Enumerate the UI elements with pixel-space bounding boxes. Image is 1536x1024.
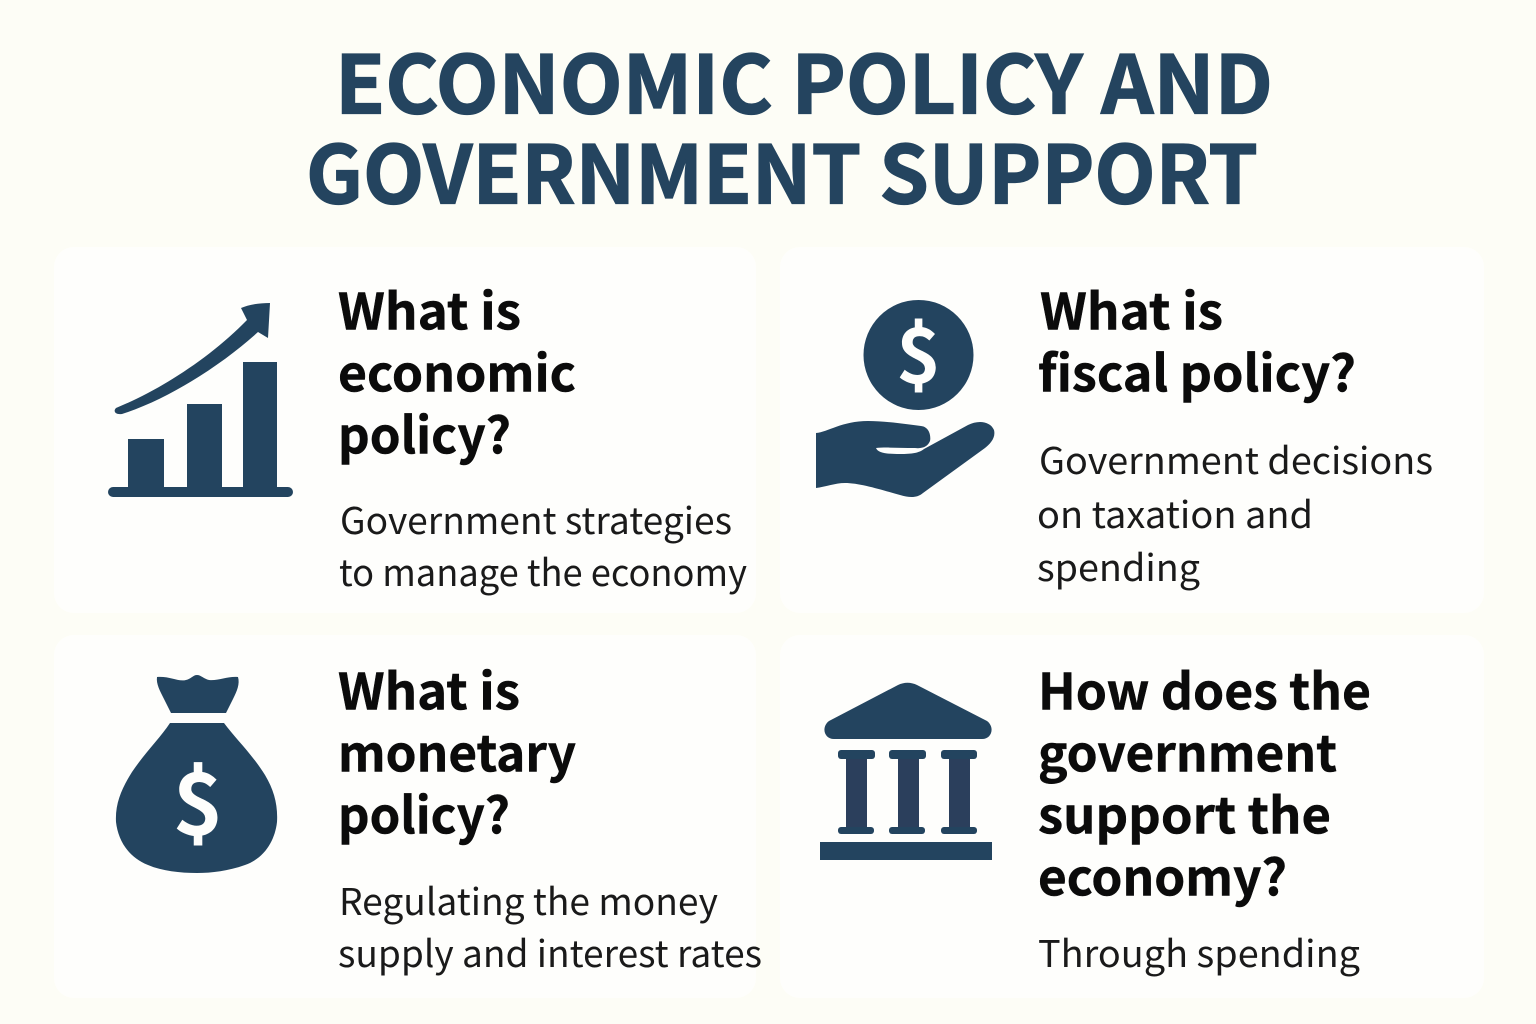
panel: government support — [780, 635, 1484, 998]
panel: monetary policy — [54, 635, 762, 998]
heading: fiscal policy? — [1038, 334, 1356, 406]
heading — [1038, 652, 1371, 910]
title: ECONOMIC POLICY AND — [335, 22, 1273, 138]
panel: fiscal policy — [780, 247, 1484, 613]
heading: What is — [338, 652, 520, 724]
icon: money bag: $ — [173, 735, 223, 860]
heading: policy? — [338, 776, 510, 848]
description — [338, 872, 762, 978]
description: to manage the economy — [339, 543, 747, 597]
heading — [338, 652, 576, 848]
heading: economy? — [1038, 838, 1287, 910]
icon: hand holding coin: $ — [896, 295, 941, 405]
heading: government — [1038, 714, 1337, 786]
heading: What is — [338, 272, 521, 344]
heading — [1038, 272, 1356, 406]
description — [1037, 431, 1433, 592]
heading: economic — [338, 334, 576, 406]
icon: hand holding coin — [816, 295, 994, 497]
description — [339, 491, 747, 597]
description: on taxation and — [1037, 485, 1313, 539]
icon: rising bar chart with arrow — [108, 303, 293, 497]
description: Regulating the money — [339, 872, 718, 926]
heading: monetary — [338, 714, 576, 786]
icon: money bag — [116, 675, 277, 873]
heading — [338, 272, 576, 468]
heading: What is — [1040, 272, 1223, 344]
description: Through spending — [1038, 924, 1360, 978]
heading: policy? — [338, 396, 511, 468]
panel: economic policy — [54, 247, 756, 613]
heading: support the — [1038, 776, 1331, 848]
title — [306, 22, 1273, 228]
icon: government building — [820, 683, 992, 860]
title: GOVERNMENT SUPPORT — [306, 112, 1258, 228]
description: supply and interest rates — [338, 924, 762, 978]
description: spending — [1037, 538, 1200, 592]
description: Government decisions — [1039, 431, 1433, 485]
description: Government strategies — [340, 491, 732, 545]
heading: How does the — [1038, 652, 1371, 724]
